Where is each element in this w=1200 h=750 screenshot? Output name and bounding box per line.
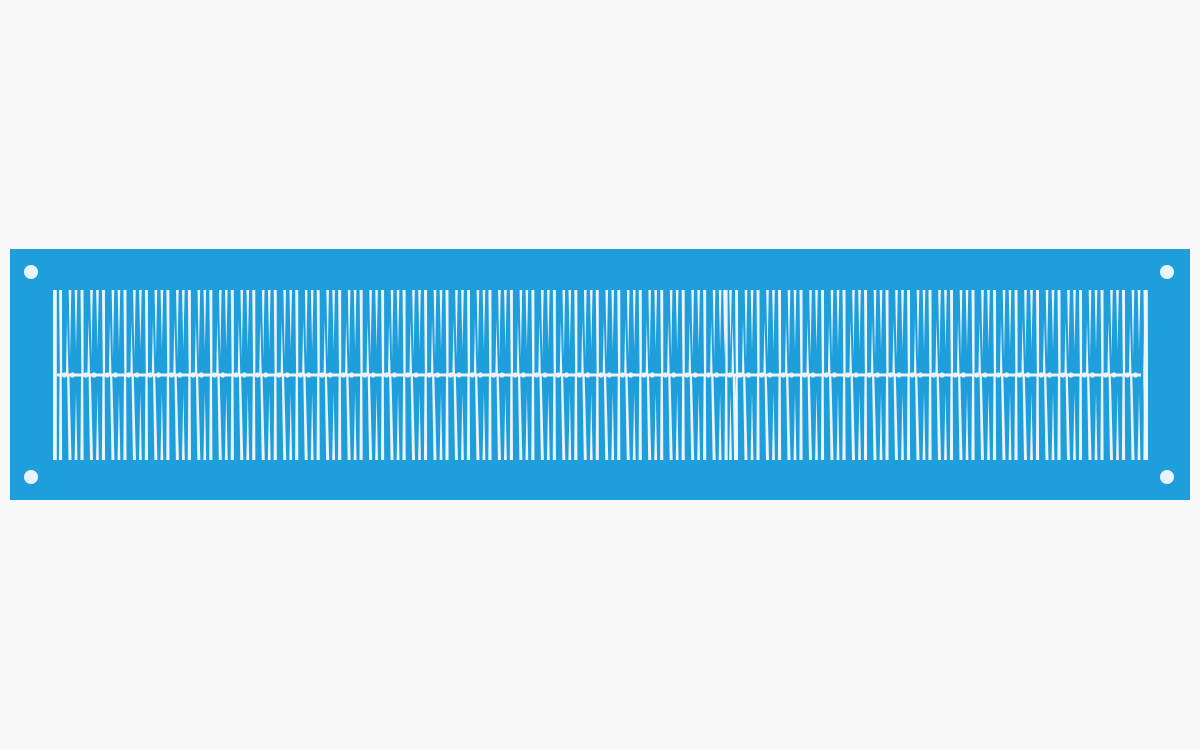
right end bar [1143, 290, 1148, 460]
panel background [10, 249, 1190, 500]
corner hole: bottom left [24, 470, 38, 484]
left end bar [53, 290, 57, 460]
infographic panel [10, 249, 1190, 500]
corner hole: top right [1160, 265, 1174, 279]
central spine [57, 374, 1141, 376]
repeating tines, right section [723, 290, 1160, 460]
corner hole: bottom right [1160, 470, 1174, 484]
repeating tines, left section [47, 290, 741, 460]
corner hole: top left [24, 265, 38, 279]
comb pattern chart [47, 290, 1160, 460]
